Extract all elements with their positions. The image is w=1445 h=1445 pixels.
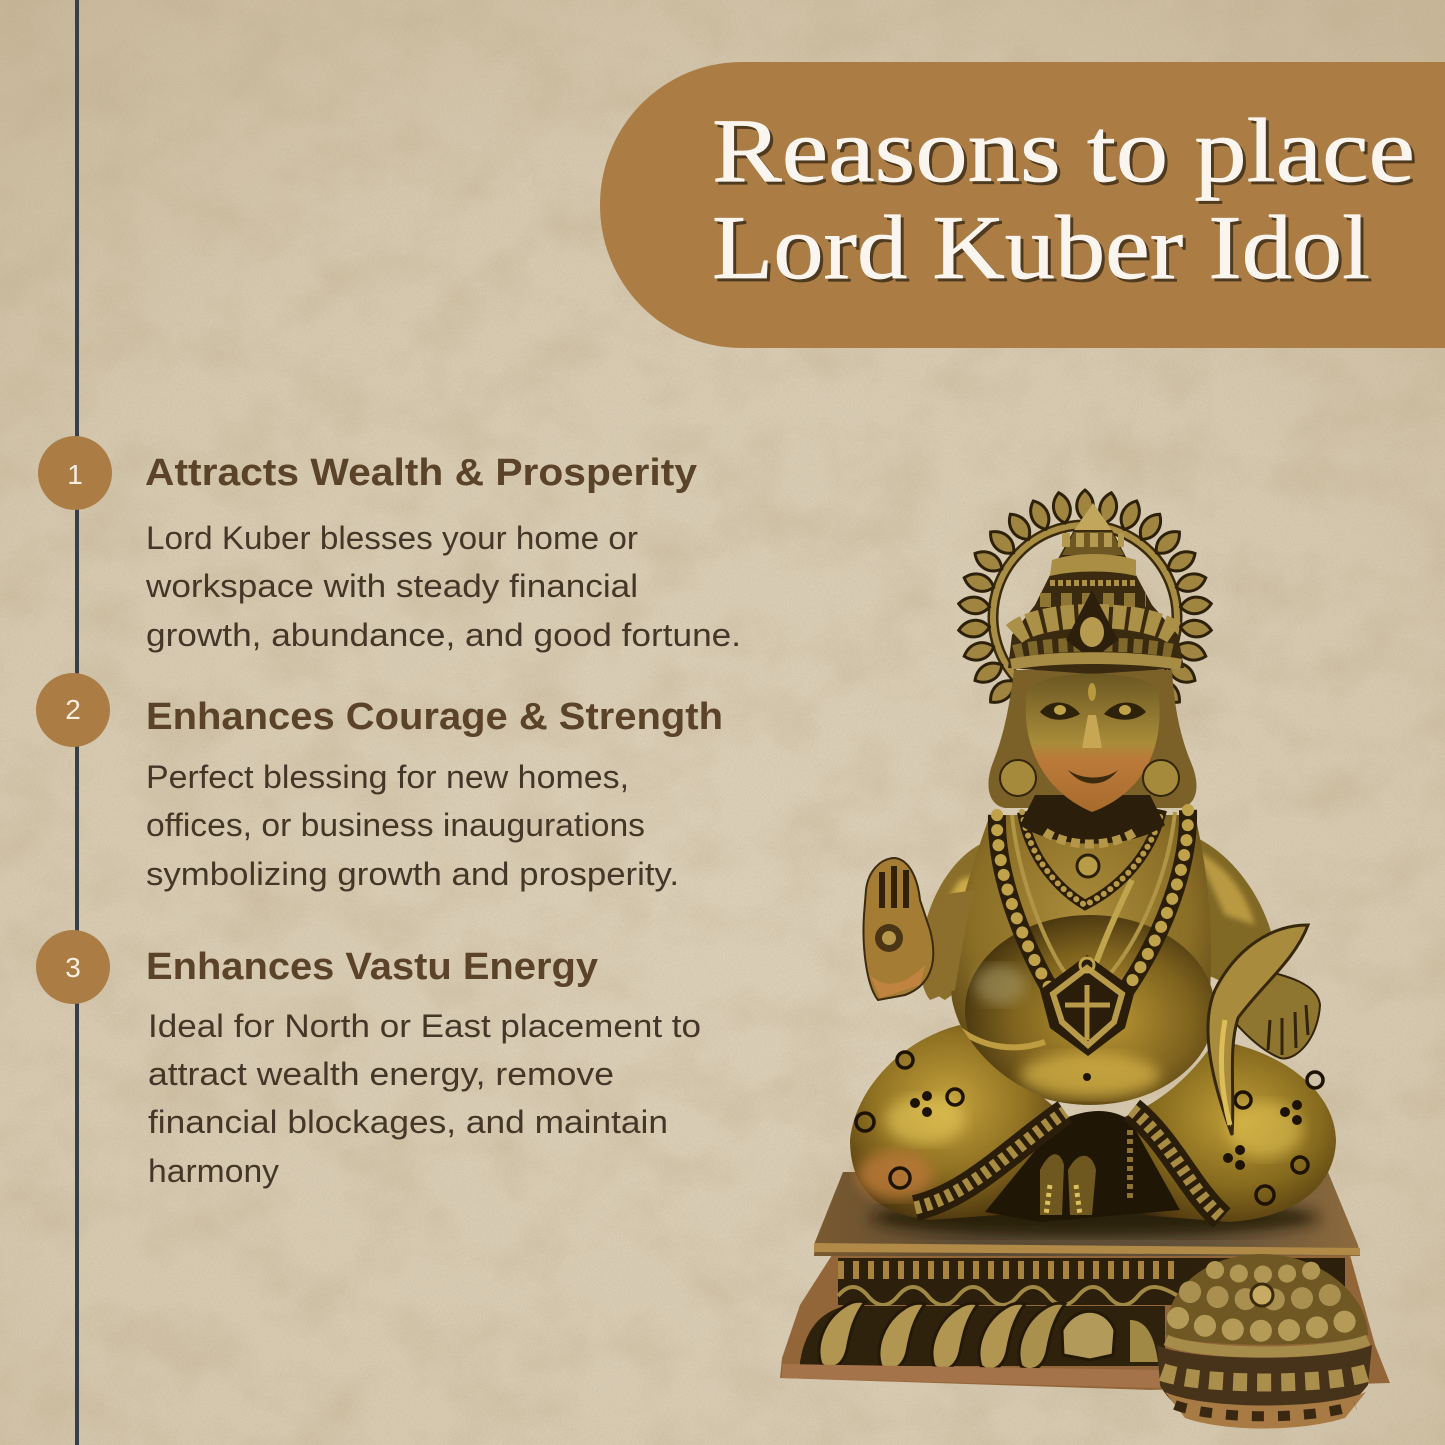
number badge 1: 1 [67, 459, 83, 490]
arms and shoulders [921, 830, 1272, 1000]
torso [951, 815, 1215, 1105]
body 2: Perfect blessing for new homes, [146, 759, 629, 795]
inner strands [1012, 812, 1175, 985]
lotus band [800, 1306, 1165, 1366]
title text: Lord Kuber Idol [715, 200, 1373, 301]
reason 1 [38, 436, 741, 653]
body 1: workspace with steady financial [145, 568, 638, 604]
body 1: growth, abundance, and good fortune. [146, 617, 741, 653]
statue shadow [870, 1200, 1320, 1236]
platform top [814, 1172, 1360, 1256]
belly [965, 915, 1215, 1105]
cloth motifs [910, 1091, 1302, 1170]
neck and choker [1020, 795, 1165, 877]
pendant [1040, 955, 1135, 1056]
outer bead strand [997, 810, 1188, 1005]
treasure pot [1157, 1254, 1372, 1428]
number badge 3: 3 [65, 952, 81, 983]
hair [988, 670, 1196, 808]
sacred thread [1088, 880, 1132, 985]
number badge 2: 2 [65, 694, 81, 725]
crossed legs [850, 1025, 1336, 1222]
pot lower body [1157, 1345, 1372, 1428]
brass Kuber idol [780, 490, 1390, 1428]
body 2 [146, 759, 679, 892]
crown [1008, 503, 1184, 674]
center of lap and feet [985, 1111, 1180, 1222]
title banner [600, 62, 1445, 348]
title text: Lord Kuber Idol [712, 197, 1370, 298]
body 3: attract wealth energy, remove [148, 1056, 614, 1092]
reason 2 [36, 673, 723, 892]
body 3: Ideal for North or East placement to [148, 1008, 701, 1044]
title text [712, 100, 1418, 301]
heading 1: Attracts Wealth & Prosperity [145, 452, 697, 494]
raised hand [864, 858, 975, 1000]
halo [958, 490, 1212, 709]
mongoose and right hand [1208, 925, 1320, 1135]
necklaces [997, 810, 1188, 1005]
number badge 2 [36, 673, 110, 747]
copper plinth sides [780, 1255, 1390, 1390]
coins [1178, 1318, 1355, 1331]
body 1 [145, 520, 741, 653]
timeline vertical line [75, 0, 79, 1445]
reason 3 [36, 930, 701, 1189]
body 3: harmony [148, 1153, 279, 1189]
body 2: offices, or business inaugurations [146, 807, 645, 843]
heading 3: Enhances Vastu Energy [146, 946, 598, 988]
number badge 3 [36, 930, 110, 1004]
body 3 [148, 1008, 701, 1189]
body 2: symbolizing growth and prosperity. [146, 856, 679, 892]
number badge 1 [38, 436, 112, 510]
title text: Reasons to place [712, 100, 1415, 201]
title text: Reasons to place [715, 103, 1418, 204]
plinth bands [838, 1258, 1345, 1305]
idol base [780, 1172, 1390, 1390]
dhoti borders [915, 1112, 1065, 1208]
body 1: Lord Kuber blesses your home or [146, 520, 638, 556]
heading 2: Enhances Courage & Strength [146, 696, 723, 738]
face [1000, 674, 1179, 812]
body 3: financial blockages, and maintain [148, 1104, 668, 1140]
